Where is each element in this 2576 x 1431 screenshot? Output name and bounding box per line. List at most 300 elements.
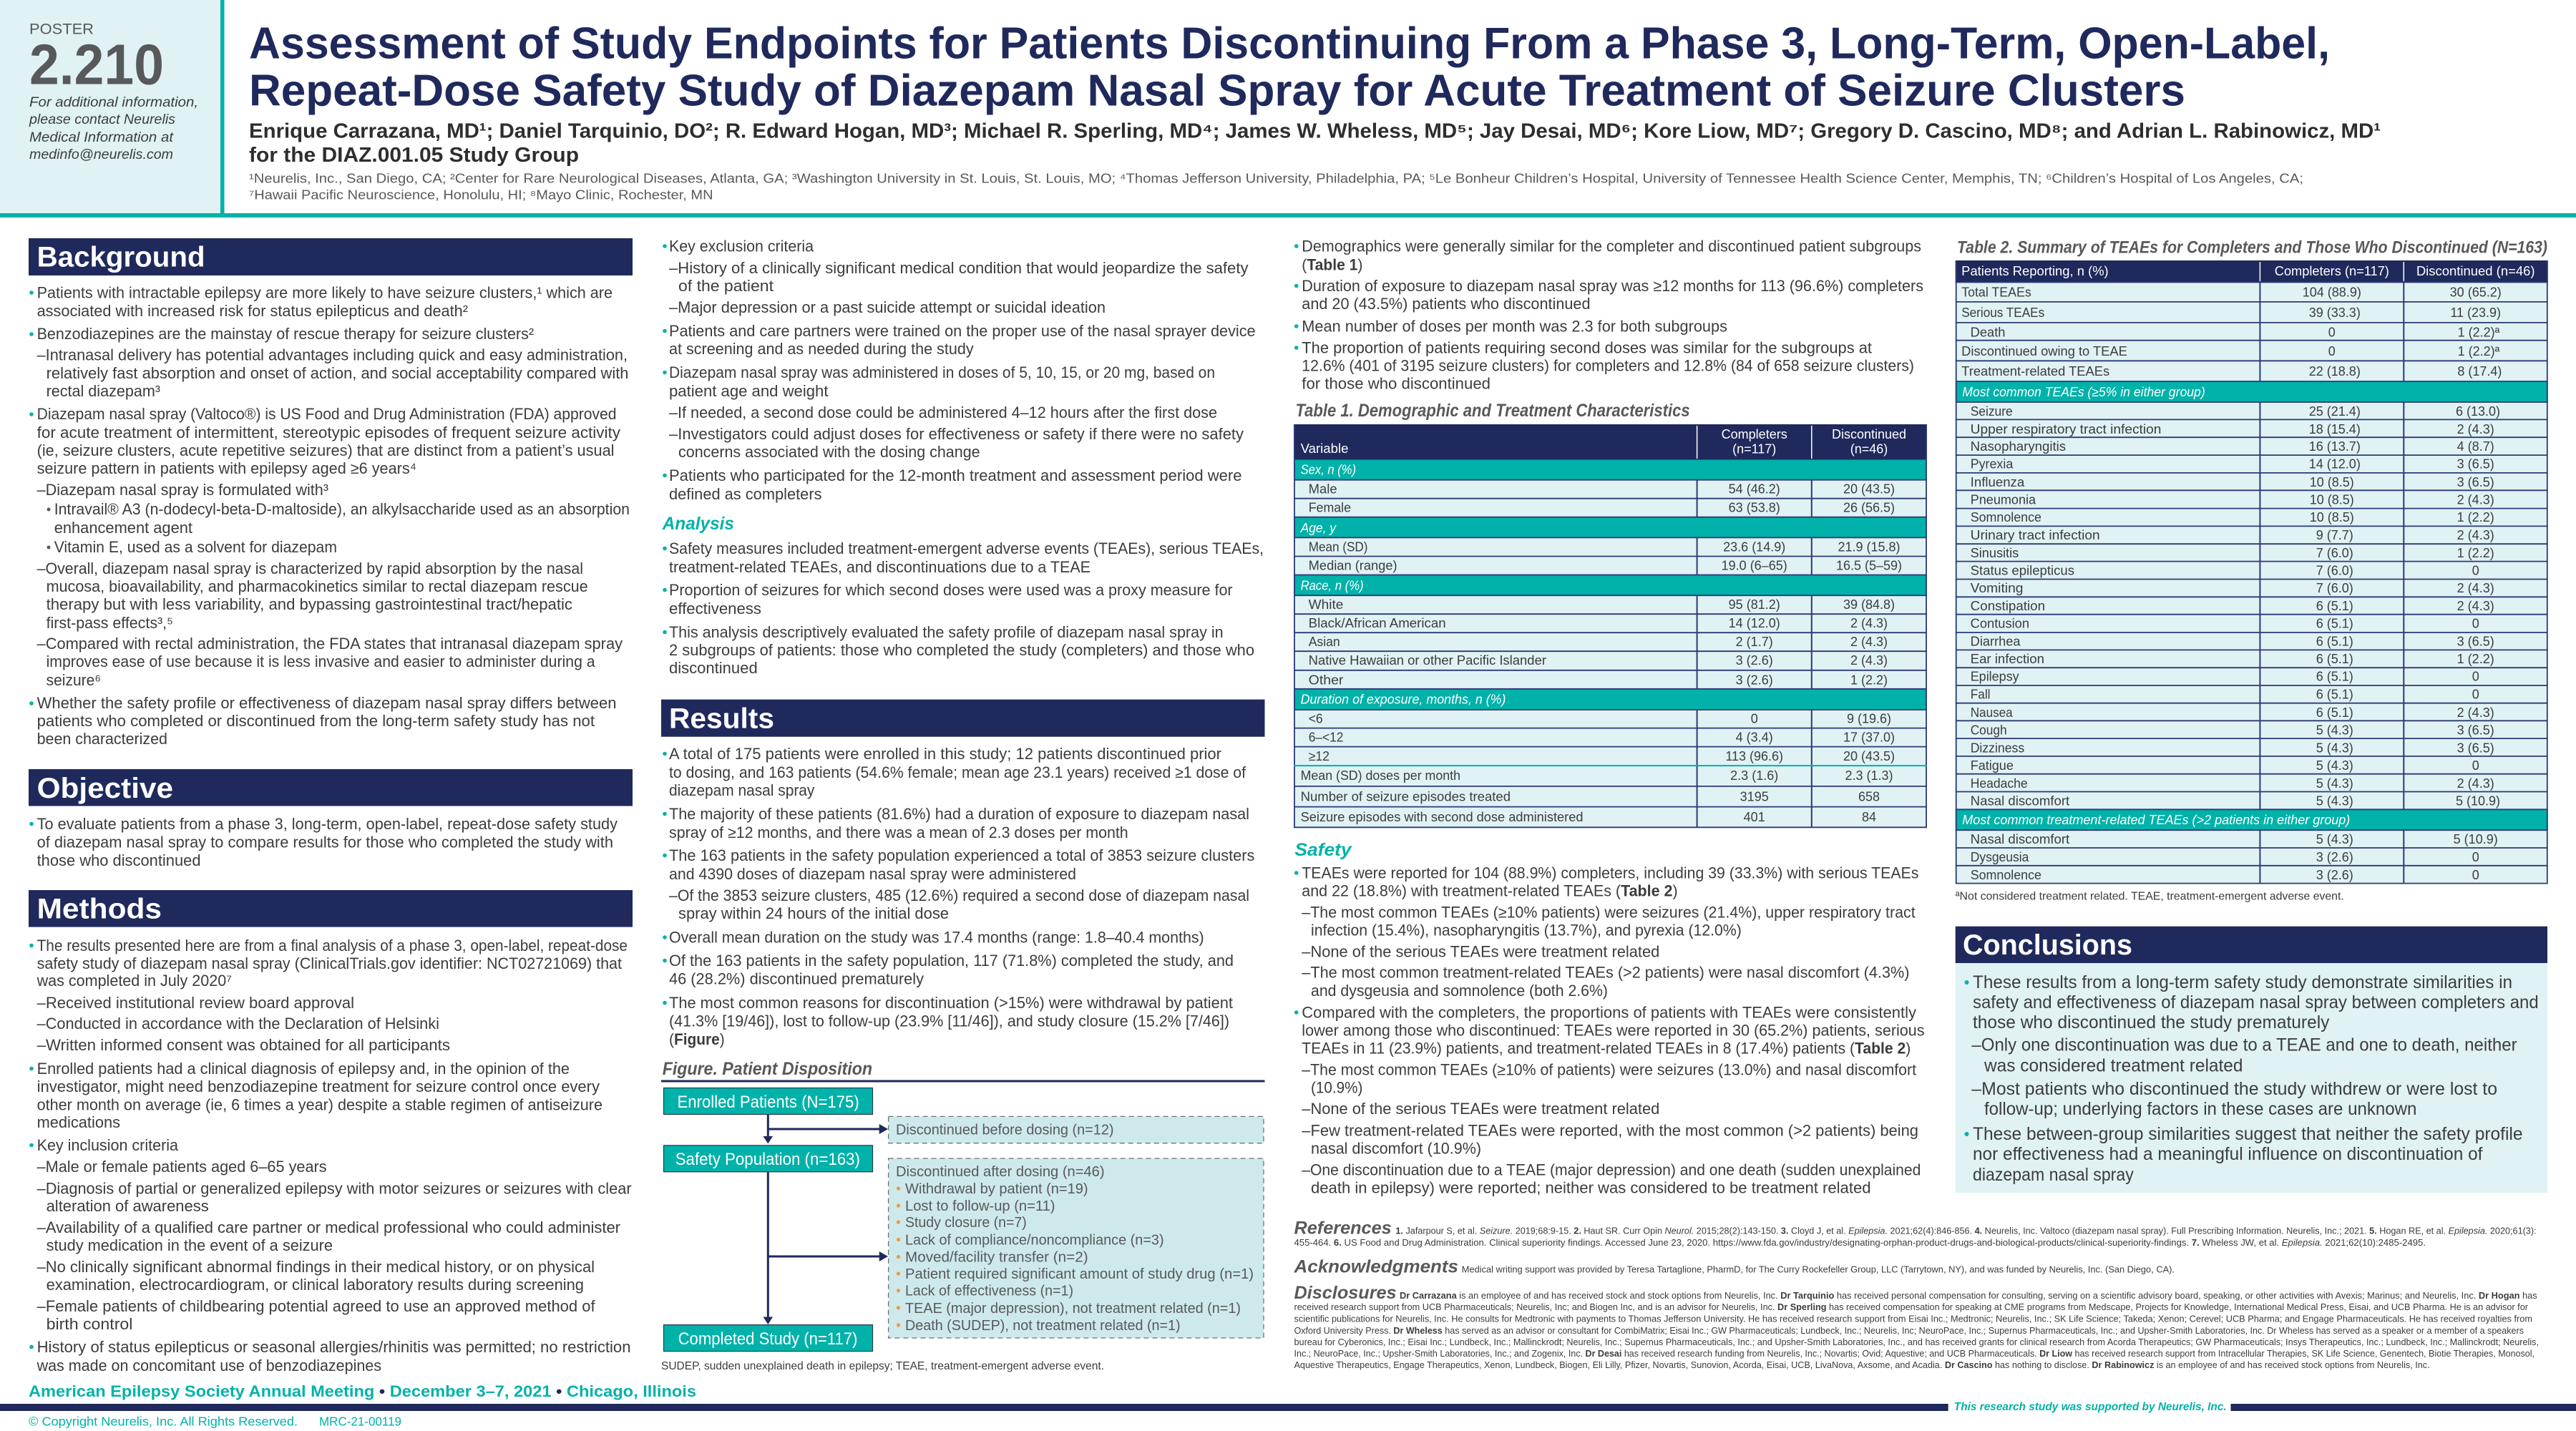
table 2: summary of TEAEs: Dizziness [1971,741,2024,755]
table 1: demographic and treatment characteristics: 26 (56.5) [1843,501,1895,515]
table 1: demographic and treatment characteristics: Median (range) [1309,558,1397,572]
poster number panel: 2.210 [29,33,164,97]
table 2: summary of TEAEs: 3 (6.5) [2457,723,2494,738]
table 2: summary of TEAEs: Death [1971,325,2005,339]
table 2: summary of TEAEs: Discontinued (n=46) [2416,264,2535,278]
box: discontinued after dosing: Moved/facility transfer (n=2) [905,1249,1088,1266]
panel: methods: safety study of diazepam nasal spray (ClinicalTrials.gov identifier: NCT02721069) that [37,954,622,972]
heading: methods: Methods [37,894,162,925]
panel: safety: –Few treatment-related TEAEs were reported, with the most common (>2 patients) being [1302,1122,1918,1140]
panel: safety: –The most common treatment-related TEAEs (>2 patients) were nasal discomfort (4.3%) [1302,964,1909,982]
panel: analysis: Proportion of seizures for which second doses were used was a proxy measure for [669,581,1233,599]
table 1: demographic and treatment characteristics: ≥12 [1309,749,1330,763]
table 2: summary of TEAEs: 6 (5.1) [2316,652,2353,666]
panel: results continued: Demographics were generally similar for the completer and discontinued patient subgroups [1302,237,1921,255]
table 1: demographic and treatment characteristics: Male [1309,482,1337,497]
panel: conclusions: nor effectiveness had a meaningful influence on discontinuation of [1973,1144,2482,1164]
table 1: demographic and treatment characteristics: 2.3 (1.3) [1845,768,1893,783]
table 1: demographic and treatment characteristics: 1 (2.2) [1850,673,1888,687]
panel: analysis [662,514,1264,677]
table 2: summary of TEAEs: 8 (17.4) [2457,364,2502,378]
table 2: summary of TEAEs: 6 (5.1) [2316,599,2353,613]
authors: Enrique Carrazana, MD¹; Daniel Tarquinio, DO²; R. Edward Hogan, MD³; Michael R. Sperling, MD⁴; James W. Wheless, MD⁵; Jay Desai, MD⁶; Kore Liow, MD⁷; Gregory D. Cascino, MD⁸; and Adrian L. Rabinowicz, MD¹ [249,120,2381,143]
box: enrolled patients: Enrolled Patients (N=175) [677,1093,859,1112]
table 2: summary of TEAEs: 0 [2472,617,2479,631]
panel: safety: –The most common TEAEs (≥10% of patients) were seizures (13.0%) and nasal discomfort [1302,1061,1916,1079]
table 1: demographic and treatment characteristics: 21.9 (15.8) [1838,539,1901,554]
figure: patient disposition [661,1059,1265,1372]
table 2: summary of TEAEs: 2 (4.3) [2457,528,2494,542]
panel: methods: study medication in the event of a seizure [47,1236,333,1254]
table 2: summary of TEAEs: Contusion [1971,617,2029,631]
panel: results continued: (Table 1) [1302,256,1362,273]
panel: methods: alteration of awareness [47,1197,209,1215]
panel: analysis: treatment-related TEAEs, and discontinuations due to a TEAE [669,558,1091,576]
table 2: summary of TEAEs: 0 [2472,868,2479,882]
box: discontinued before dosing [889,1116,1264,1143]
panel: background: (ie, seizure clusters, acute repetitive seizures) that are distinct from a patient’s usual [37,441,615,459]
panel: results: The majority of these patients (81.6%) had a duration of exposure to diazepam nasal [669,805,1249,823]
disclosures: Dr Carrazana is an employee of and has received stock and stock options from Neurelis, Inc. Dr Tarquinio has received personal compensation for consulting, serving on a scientific advisory board, speaking, or other activities with Avexis; Marinus; and Neurelis, Inc. Dr Hogan has [1400,1291,2537,1301]
table 2: summary of TEAEs: 5 (4.3) [2316,793,2353,808]
panel: analysis: 2 subgroups of patients: those who completed the study (completers) and those who [669,641,1254,659]
panel: background: –Overall, diazepam nasal spray is characterized by rapid absorption by the nasal [37,560,583,577]
panel: safety: TEAEs were reported for 104 (88.9%) completers, including 39 (33.3%) with serious TEAEs [1302,864,1918,882]
panel: methods: Key inclusion criteria [37,1136,179,1154]
table 2: summary of TEAEs: Headache [1971,776,2028,791]
box: safety population [664,1146,873,1172]
panel: background: Intravail® A3 (n-dodecyl-beta-D-maltoside), an alkylsaccharide used as an absorption [54,500,630,518]
panel: methods continued: –History of a clinically significant medical condition that would jeopardize the safety [669,259,1248,277]
table 2: summary of TEAEs: 9 (7.7) [2316,528,2353,542]
panel: methods continued [663,238,1256,503]
table 2: summary of TEAEs: 3 (6.5) [2457,741,2494,755]
panel: methods continued: –Major depression or a past suicide attempt or suicidal ideation [669,298,1106,316]
table 1: demographic and treatment characteristics [1294,424,1927,827]
panel: safety: lower among those who discontinued: TEAEs were reported in 30 (65.2%) patients, serious [1302,1022,1925,1040]
table 2: summary of TEAEs: Status epilepticus [1971,564,2074,578]
panel: safety [1294,840,1925,1196]
table 2: summary of TEAEs: Influenza [1971,475,2025,489]
table 1: demographic and treatment characteristics: Number of seizure episodes treated [1301,790,1511,804]
panel: methods: –Male or female patients aged 6–65 years [37,1158,327,1176]
panel: methods: examination, electrocardiogram, or clinical laboratory results during screening [47,1276,584,1294]
table 2: summary of TEAEs: 6 (5.1) [2316,617,2353,631]
table 1: demographic and treatment characteristics: (n=117) [1732,441,1776,456]
table 2: summary of TEAEs: Treatment-related TEAEs [1961,364,2109,378]
table 2: summary of TEAEs: 0 [2472,850,2479,864]
box: discontinued after dosing: Lost to follow-up (n=11) [905,1198,1055,1214]
table 2: summary of TEAEs: 39 (33.3) [2309,306,2361,320]
table 2: summary of TEAEs: Nausea [1971,705,2014,720]
table 2: summary of TEAEs: Fatigue [1971,758,2014,773]
panel: results: –Of the 3853 seizure clusters, 485 (12.6%) required a second dose of diazepam nasal [669,887,1249,904]
panel: background: Patients with intractable epilepsy are more likely to have seizure clusters,¹ which are [37,283,613,301]
disclosures: Inc.; NeuroPace, Inc.; Upsher-Smith Laboratories, Inc.; and Zogenix, Inc. Dr Desai has received research funding from Neurelis, Inc.; Novartis; Ovid; Aquestive; and UCB Pharmaceuticals. Dr Liow has received research support from Intracellular Therapies, SK Life Science, Genentech, Biotie Therapies, Monosol, [1294,1349,2534,1359]
table 2: summary of TEAEs: Pneumonia [1971,493,2036,507]
panel: methods: Enrolled patients had a clinical diagnosis of epilepsy and, in the opinion of the [37,1060,570,1078]
panel: conclusions: was considered treatment related [1984,1056,2243,1076]
box: discontinued after dosing: Patient required significant amount of study drug (n=1) [905,1266,1254,1282]
table 2: summary of TEAEs: 7 (6.0) [2316,581,2353,595]
panel: background: seizure pattern in patients with epilepsy aged ≥6 years⁴ [37,459,416,477]
table 1: demographic and treatment characteristics: 2 (4.3) [1850,635,1888,649]
table 2: summary of TEAEs: Serious TEAEs [1961,306,2044,320]
table 2: summary of TEAEs: 2 (4.3) [2457,776,2494,791]
panel: safety: death in epilepsy) were reported; neither was considered to be treatment related [1311,1178,1870,1196]
table 2: summary of TEAEs: Urinary tract infection [1971,528,2100,542]
box: discontinued after dosing: Discontinued after dosing (n=46) [896,1163,1105,1180]
panel: methods continued: –Investigators could adjust doses for effectiveness or safety if there were no safety [669,425,1244,443]
panel: results: spray of ≥12 months, and there was a mean of 2.3 doses per month [669,824,1128,841]
table 1: demographic and treatment characteristics: 658 [1858,790,1880,804]
panel: results: diazepam nasal spray [669,781,814,799]
box: discontinued after dosing: Study closure (n=7) [905,1214,1027,1231]
references [1294,1218,2537,1248]
panel: safety: TEAEs in 11 (23.9%) patients, and treatment-related TEAEs in 8 (17.4%) patients (Table 2) [1302,1040,1911,1058]
table 1: demographic and treatment characteristics: 113 (96.6) [1725,749,1783,763]
affiliations [249,172,2303,202]
panel: results [661,700,1265,1048]
table 1: demographic and treatment characteristics: 39 (84.8) [1843,597,1895,612]
table 2: summary of TEAEs: 2 (4.3) [2457,422,2494,436]
table 1: demographic and treatment characteristics: Mean (SD) doses per month [1301,768,1460,783]
panel: conclusions: –Most patients who discontinued the study withdrew or were lost to [1971,1079,2497,1099]
panel: analysis: Safety measures included treatment-emergent adverse events (TEAEs), serious TEAEs, [669,539,1264,557]
title: Repeat-Dose Safety Study of Diazepam Nasal Spray for Acute Treatment of Seizure Clusters [249,67,2185,116]
panel: methods continued: Diazepam nasal spray was administered in doses of 5, 10, 15, or 20 mg, based on [669,363,1215,381]
poster number panel [0,0,225,213]
table 2: summary of TEAEs: 11 (23.9) [2450,306,2501,320]
table 2: summary of TEAEs: Vomiting [1971,581,2024,595]
affiliations: ¹Neurelis, Inc., San Diego, CA; ²Center for Rare Neurological Diseases, Atlanta, GA; ³Washington University in St. Louis, St. Louis, MO; ⁴Thomas Jefferson University, Philadelphia, PA; ⁵Le Bonheur Children’s Hospital, University of Tennessee Health Science Center, Memphis, TN; ⁶Children’s Hospital of Los Angeles, CA; [249,172,2303,186]
panel: safety: –None of the serious TEAEs were treatment related [1302,1100,1659,1118]
table 2: summary of TEAEs: 5 (4.3) [2316,758,2353,773]
panel: background: been characterized [37,730,167,748]
table 2: summary of TEAEs: 3 (2.6) [2316,868,2353,882]
panel: results: Overall mean duration on the study was 17.4 months (range: 1.8–40.4 months) [669,929,1204,947]
table 2: summary of TEAEs: 5 (4.3) [2316,776,2353,791]
table 2: summary of TEAEs: Seizure [1971,404,2013,419]
table 2: summary of TEAEs: Nasal discomfort [1971,793,2069,808]
references: References [1294,1218,1392,1238]
panel: background: Whether the safety profile or effectiveness of diazepam nasal spray differs between [37,694,617,712]
table 2: summary of TEAEs: 4 (8.7) [2457,439,2494,454]
panel: methods: The results presented here are from a final analysis of a phase 3, open-label, repeat-dose [37,937,628,954]
panel: conclusions: These results from a long-term safety study demonstrate similarities in [1973,972,2512,992]
panel: background: improves ease of use because it is less invasive and easier to administer during a [47,653,595,670]
panel: results: spray within 24 hours of the initial dose [678,904,949,922]
panel: safety: nasal discomfort (10.9%) [1311,1139,1481,1157]
panel: background: Diazepam nasal spray (Valtoco®) is US Food and Drug Administration (FDA) approved [37,405,617,423]
panel: background: –Intranasal delivery has potential advantages including quick and easy administration, [37,346,628,364]
authors [249,120,2381,167]
poster number panel: POSTER [29,21,94,38]
table 2: summary of TEAEs: 7 (6.0) [2316,546,2353,560]
poster number panel: please contact Neurelis [29,112,176,127]
panel: methods continued: defined as completers [669,485,821,503]
table 2: summary of TEAEs: 6 (5.1) [2316,705,2353,720]
panel: methods: was made on concomitant use of benzodiazepines [36,1357,381,1374]
panel: analysis: effectiveness [669,600,761,617]
table 1: demographic and treatment characteristics: 3 (2.6) [1736,673,1773,687]
footer: copyright: © Copyright Neurelis, Inc. All Rights Reserved. [29,1415,298,1429]
table 1: demographic and treatment characteristics: 3 (2.6) [1736,653,1773,668]
box: discontinued after dosing: TEAE (major depression), not treatment related (n=1) [905,1300,1241,1317]
panel: background: rectal diazepam³ [47,382,160,400]
panel: conclusions: diazepam nasal spray [1973,1165,2134,1185]
panel: results continued [1294,237,1923,392]
table 1: demographic and treatment characteristics: 19.0 (6–65) [1722,558,1787,572]
table 1: demographic and treatment characteristics: 14 (12.0) [1729,616,1780,630]
disclosures: received research support from UCB Pharmaceuticals; Neurelis, Inc; and Biogen Inc, and is an advisor for Neurelis, Inc. Dr Sperling has received compensation for speaking at CME programs from Medscape, Projects for Knowledge, International Medical Press, Eisai, and UCB Pharma. He is an advisor for [1294,1302,2528,1312]
panel: results: Of the 163 patients in the safety population, 117 (71.8%) completed the study, and [669,952,1234,970]
panel: analysis: discontinued [669,659,758,677]
table 2: summary of TEAEs: 1 (2.2) [2457,652,2494,666]
panel: results: to dosing, and 163 patients (54.6% female; mean age 23.1 years) received ≥1 dose of [669,763,1246,781]
table 2: summary of TEAEs: Diarrhea [1971,634,2021,648]
table 2: summary of TEAEs: Nasal discomfort [1971,832,2069,846]
panel: methods: medications [37,1113,120,1131]
panel: results: A total of 175 patients were enrolled in this study; 12 patients discontinued prior [669,745,1221,763]
panel: methods: –Conducted in accordance with the Declaration of Helsinki [37,1015,439,1032]
table 2: summary of TEAEs: 1 (2.2)ª [2458,325,2500,339]
table 2: summary of TEAEs: 25 (21.4) [2309,404,2361,419]
panel: objective [29,769,633,869]
table 1: demographic and treatment characteristics: 63 (53.8) [1729,501,1780,515]
acknowledgments [1293,1256,2175,1276]
panel: results: (Figure) [669,1030,725,1048]
panel: conclusions [1956,927,2547,1193]
panel: methods [29,890,633,1374]
panel: results continued: Duration of exposure to diazepam nasal spray was ≥12 months for 113 (96.6%) completers [1302,277,1923,295]
panel: methods continued: concerns associated with the dosing change [678,443,980,461]
panel: background: Vitamin E, used as a solvent for diazepam [54,538,337,556]
table 2: summary of TEAEs: Total TEAEs [1961,285,2031,299]
box: discontinued after dosing: Withdrawal by patient (n=19) [905,1181,1088,1197]
footer: copyright [29,1415,401,1429]
table 2: summary of TEAEs: 14 (12.0) [2309,457,2361,472]
table 1: demographic and treatment characteristics: Discontinued [1832,427,1906,441]
disclosures: bureau for Cyberonics, Inc.; Eisai Inc.; Lundbeck, Inc.; Mallinckrodt; Neurelis, Inc.; Supernus Pharmaceuticals, Inc.; and Upsher-Smith Laboratories, Inc., and has received grants for clinical research from Acorda Therapeutics; GW Pharmaceuticals; Insys Therapeutics, Inc.; Lundbeck, Inc.; Mallinckrodt; Neurelis, [1294,1337,2539,1347]
table 1 title: Table 1. Demographic and Treatment Characteristics [1295,401,1690,421]
table 1: demographic and treatment characteristics: 20 (43.5) [1843,482,1895,497]
panel: results continued: and 20 (43.5%) patients who discontinued [1302,295,1590,313]
panel: results continued: 12.6% (401 of 3195 seizure clusters) for completers and 12.8% (84 of 658 seizure clusters) [1302,356,1914,374]
footer: meeting line: American Epilepsy Society Annual Meeting • December 3–7, 2021 • Chicago, Illinois [29,1382,696,1400]
table 2: summary of TEAEs: 3 (2.6) [2316,850,2353,864]
panel: methods continued: at screening and as needed during the study [669,340,974,358]
table 2: summary of TEAEs [1956,260,2548,884]
table 2: summary of TEAEs: 3 (6.5) [2457,634,2494,648]
table 1: demographic and treatment characteristics: Other [1309,673,1343,687]
authors: for the DIAZ.001.05 Study Group [249,144,579,167]
table 1: demographic and treatment characteristics: Variable [1301,441,1348,456]
affiliations: ⁷Hawaii Pacific Neuroscience, Honolulu, HI; ⁸Mayo Clinic, Rochester, MN [249,188,713,202]
panel: background: –Diazepam nasal spray is formulated with³ [37,481,328,499]
table 1: demographic and treatment characteristics: (n=46) [1850,441,1888,456]
table 2: summary of TEAEs: 0 [2472,758,2479,773]
panel: methods: –Diagnosis of partial or generalized epilepsy with motor seizures or seizures with clear [37,1179,632,1198]
panel: conclusions: those who discontinued the study prematurely [1973,1012,2330,1032]
panel: conclusions: safety and effectiveness of diazepam nasal spray between completers and [1973,992,2539,1012]
table 1: demographic and treatment characteristics: White [1309,597,1343,612]
footer: copyright: MRC-21-00119 [319,1415,401,1429]
acknowledgments: Medical writing support was provided by Teresa Tartaglione, PharmD, for The Curry Rockefeller Group, LLC (Tarrytown, NY), and was funded by Neurelis, Inc. (San Diego, CA). [1462,1264,2175,1274]
table 1: demographic and treatment characteristics: Sex, n (%) [1301,462,1356,477]
footer bar [0,1401,2576,1413]
poster number panel: For additional information, [29,95,198,110]
panel: safety: infection (15.4%), nasopharyngitis (13.7%), and pyrexia (12.0%) [1311,922,1742,939]
table 2: summary of TEAEs: Somnolence [1971,868,2041,882]
panel: background: relatively fast absorption and onset of action, and social acceptability compared with [47,364,629,382]
table 2: summary of TEAEs: 5 (4.3) [2316,832,2353,846]
panel: background: seizure⁶ [47,671,101,689]
table 2: summary of TEAEs: 104 (88.9) [2303,285,2361,299]
box: discontinued after dosing: Lack of compliance/noncompliance (n=3) [905,1232,1164,1248]
table 2: summary of TEAEs: Completers (n=117) [2275,264,2389,278]
table 2: summary of TEAEs: 10 (8.5) [2310,475,2354,489]
table 2: summary of TEAEs: 0 [2472,564,2479,578]
heading: results: Results [669,703,774,734]
panel: methods continued: Key exclusion criteria [669,238,814,255]
box: discontinued after dosing: Lack of effectiveness (n=1) [905,1283,1073,1299]
panel: methods: –No clinically significant abnormal findings in their medical history, or on physical [37,1258,595,1276]
table 2: summary of TEAEs: Dysgeusia [1971,850,2029,864]
panel: safety: –The most common TEAEs (≥10% patients) were seizures (21.4%), upper respiratory tract [1302,904,1916,922]
panel: methods: was completed in July 2020⁷ [36,972,232,990]
panel: methods continued: of the patient [678,277,774,295]
table 2: summary of TEAEs: 2 (4.3) [2457,705,2494,720]
panel: conclusions: follow-up; underlying factors in these cases are unknown [1984,1099,2416,1119]
table 2: summary of TEAEs: 6 (5.1) [2316,670,2353,684]
table 2: summary of TEAEs: Most common TEAEs (≥5% in either group) [1962,385,2205,399]
table 1: demographic and treatment characteristics: 20 (43.5) [1843,749,1895,763]
table 2: summary of TEAEs: 0 [2472,670,2479,684]
panel: methods: other month on average (ie, 6 times a year) despite a stable regimen of antiseizure [37,1096,602,1114]
table 1: demographic and treatment characteristics: Black/African American [1309,616,1446,630]
table 1: demographic and treatment characteristics: 9 (19.6) [1847,711,1891,726]
table 1: demographic and treatment characteristics: 54 (46.2) [1729,482,1780,497]
table 2: summary of TEAEs: 3 (6.5) [2457,475,2494,489]
table 1: demographic and treatment characteristics: Asian [1309,635,1340,649]
panel: objective: of diazepam nasal spray to compare results for those who completed the study with [37,834,613,851]
table 2: summary of TEAEs: 1 (2.2)ª [2458,344,2500,358]
table 2: summary of TEAEs: 30 (65.2) [2450,285,2502,299]
panel: safety: –None of the serious TEAEs were treatment related [1302,942,1659,960]
table 1: demographic and treatment characteristics: 2 (4.3) [1850,653,1888,668]
panel: background: first-pass effects³,⁵ [47,614,173,632]
table 2: summary of TEAEs: Most common treatment-related TEAEs (>2 patients in either group) [1962,813,2350,827]
disclosures: scientific publications for Neurelis, Inc. He consults for Medtronic with payments to Thomas Jefferson University. He has received research support from Eisai Inc.; Medtronic; Neurelis, Inc.; SK Life Science; Takeda; Xenon; Cerevel; UCB Pharma; and Engage Pharmaceuticals. He has received royalties from [1294,1314,2532,1324]
panel: results: and 4390 doses of diazepam nasal spray were administered [669,865,1076,883]
panel: background: patients who completed or discontinued from the long-term safety study has not [37,712,595,730]
panel: methods continued: –If needed, a second dose could be administered 4–12 hours after the first dose [669,404,1217,421]
heading: objective: Objective [37,773,173,804]
table 1: demographic and treatment characteristics: 95 (81.2) [1729,597,1780,612]
panel: background: Benzodiazepines are the mainstay of rescue therapy for seizure clusters² [37,325,534,343]
table 2: summary of TEAEs: Constipation [1971,599,2045,613]
table 2: summary of TEAEs: 10 (8.5) [2310,510,2354,524]
table 2: summary of TEAEs: 2 (4.3) [2457,581,2494,595]
table 2: summary of TEAEs: Sinusitis [1971,546,2019,560]
table 1: demographic and treatment characteristics: 16.5 (5–59) [1836,558,1902,572]
figure footnote: SUDEP, sudden unexplained death in epilepsy; TEAE, treatment-emergent adverse event. [661,1360,1104,1372]
table 2: summary of TEAEs: Upper respiratory tract infection [1971,422,2161,436]
heading: background: Background [37,242,205,273]
table 2: summary of TEAEs: Epilepsy [1971,670,2019,684]
panel: background: associated with increased risk for status epilepticus and death² [37,302,468,320]
table 1: demographic and treatment characteristics: Female [1309,501,1351,515]
table 2: summary of TEAEs: 1 (2.2) [2457,546,2494,560]
references: 1. Jafarpour S, et al. Seizure. 2019;68:9-15. 2. Haut SR. Curr Opin Neurol. 2015;28(2):143-150. 3. Cloyd J, et al. Epilepsia. 2021;62(4):846-856. 4. Neurelis, Inc. Valtoco (diazepam nasal spray). Full Prescribing Information. Neurelis, Inc.; 2021. 5. Hogan RE, et al. Epilepsia. 2020;61(3): [1395,1226,2537,1236]
panel: objective: those who discontinued [37,851,200,869]
table 2: summary of TEAEs: Cough [1971,723,2007,738]
table 1: demographic and treatment characteristics: 3195 [1740,790,1769,804]
table 2: summary of TEAEs: 0 [2472,688,2479,702]
disclosures [1294,1283,2539,1370]
panel: methods: birth control [47,1315,132,1333]
panel: results: The most common reasons for discontinuation (>15%) were withdrawal by patient [669,994,1233,1012]
panel: methods: investigator, might need benzodiazepine treatment for seizure control once every [37,1078,600,1095]
title: Assessment of Study Endpoints for Patients Discontinuing From a Phase 3, Long-Term, Open-Label, [249,19,2330,69]
table 2: summary of TEAEs: Nasopharyngitis [1971,439,2066,454]
acknowledgments: Acknowledgments [1293,1256,1458,1276]
panel: methods: –Written informed consent was obtained for all participants [37,1036,450,1054]
panel: safety: –One discontinuation due to a TEAE (major depression) and one death (sudden unexplained [1302,1161,1921,1178]
table 2: summary of TEAEs: 5 (4.3) [2316,723,2353,738]
table 2: summary of TEAEs: 6 (5.1) [2316,634,2353,648]
disclosures: Disclosures [1294,1283,1397,1303]
panel: conclusions: These between-group similarities suggest that neither the safety profile [1973,1124,2523,1144]
panel: background: therapy but with less variability, and bypassing gastrointestinal tract/hepatic [47,595,572,613]
box: enrolled patients [664,1088,873,1115]
table 1: demographic and treatment characteristics: 0 [1751,711,1758,726]
panel: background: –Compared with rectal administration, the FDA states that intranasal diazepam spray [37,635,623,653]
box: completed study: Completed Study (n=117) [678,1329,857,1349]
table 1: demographic and treatment characteristics: Age, y [1300,521,1337,535]
table 1: demographic and treatment characteristics: Seizure episodes with second dose administered [1301,810,1583,824]
table 2: summary of TEAEs: 16 (13.7) [2309,439,2361,454]
panel: safety: (10.9%) [1311,1079,1362,1097]
panel: safety: and 22 (18.8%) with treatment-related TEAEs (Table 2) [1302,882,1678,900]
table 2: summary of TEAEs: 5 (10.9) [2456,793,2500,808]
panel: safety: and dysgeusia and somnolence (both 2.6%) [1311,982,1608,1000]
panel: objective: To evaluate patients from a phase 3, long-term, open-label, repeat-dose safety study [37,815,618,833]
table 1: demographic and treatment characteristics: Duration of exposure, months, n (%) [1301,692,1506,706]
panel: methods continued: Patients and care partners were trained on the proper use of the nasal sprayer device [669,322,1256,340]
table 2: summary of TEAEs: 22 (18.8) [2309,364,2361,378]
panel: methods: History of status epilepticus or seasonal allergies/rhinitis was permitted; no restriction [37,1338,630,1356]
table 2: summary of TEAEs: 0 [2328,325,2336,339]
table 2: summary of TEAEs: 3 (6.5) [2457,457,2494,472]
box: discontinued after dosing: Death (SUDEP), not treatment related (n=1) [905,1317,1181,1334]
panel: results continued: for those who discontinued [1302,374,1491,392]
table 2: summary of TEAEs: Fall [1971,688,1991,702]
table 1: demographic and treatment characteristics: 401 [1744,810,1765,824]
table 1: demographic and treatment characteristics: 4 (3.4) [1736,730,1773,744]
table 1: demographic and treatment characteristics: 2.3 (1.6) [1730,768,1778,783]
panel: results: (41.3% [19/46]), lost to follow-up (23.9% [11/46]), and study closure (15.2% [7/46]) [669,1012,1229,1030]
table 2: summary of TEAEs: 6 (13.0) [2456,404,2500,419]
table 2 footnote: ªNot considered treatment related. TEAE, treatment-emergent adverse event. [1956,890,2344,903]
box: safety population: Safety Population (n=163) [675,1150,860,1169]
disclosures: Aquestive Therapeutics, Engage Therapeutics, Xenon, Lundbeck, Biogen, Eli Lilly, Pfizer, Novartis, Sunovion, Acorda, Eisai, UCB, LivaNova, Axsome, and Acadia. Dr Cascino has nothing to disclose. Dr Rabinowicz is an employee of and has received stock options from Neurelis, Inc. [1294,1360,2430,1370]
table 2: summary of TEAEs: 5 (10.9) [2454,832,2498,846]
table 2: summary of TEAEs: 1 (2.2) [2457,510,2494,524]
table 1: demographic and treatment characteristics: <6 [1309,711,1323,726]
table 2: summary of TEAEs: Somnolence [1971,510,2041,524]
